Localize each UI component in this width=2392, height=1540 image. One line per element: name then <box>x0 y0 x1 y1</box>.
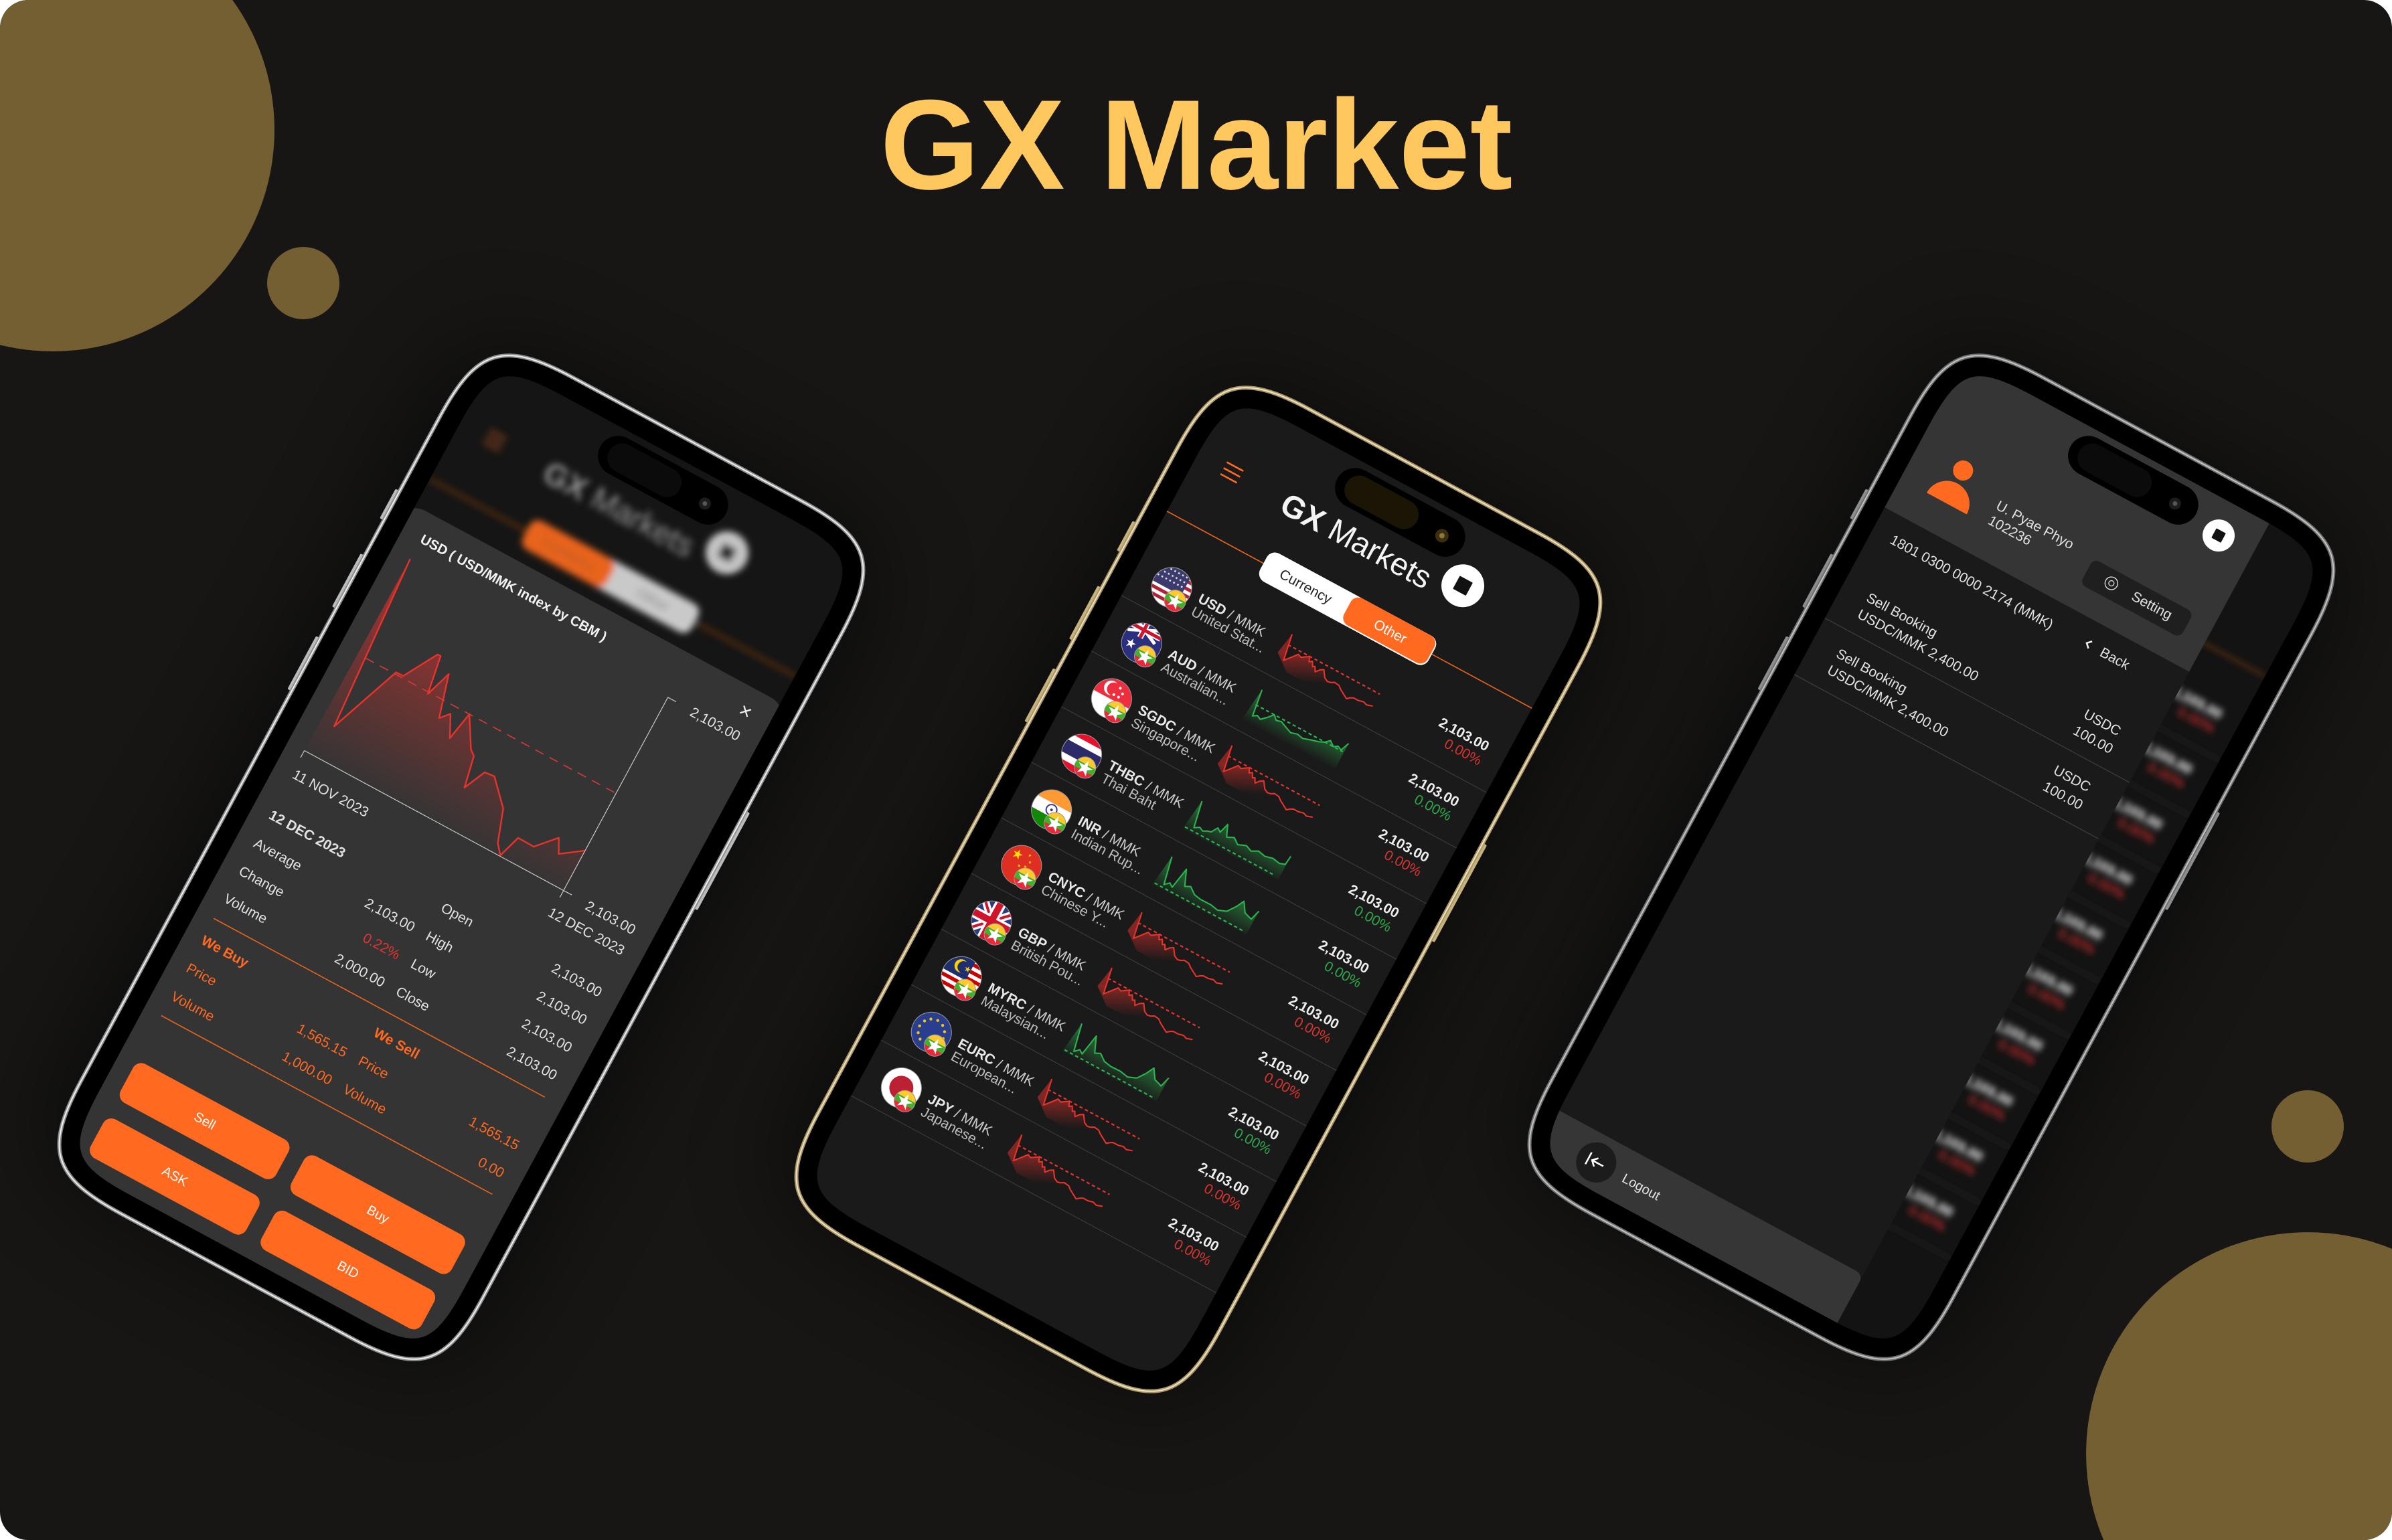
dynamic island <box>2061 429 2205 532</box>
buy and sell rates: Volume <box>340 1082 389 1118</box>
row: EURC: 2,103.00 <box>1196 1160 1251 1199</box>
row: GBP: British Pou... <box>1008 938 1086 989</box>
flag: USA <box>1144 560 1199 614</box>
row: USD <box>1144 560 1493 774</box>
logout panel: Logout <box>1619 1171 1663 1204</box>
row: AUD: AUD / MMK <box>1166 647 1239 696</box>
logo <box>2197 514 2241 558</box>
button: ASK: ASK <box>159 1164 190 1189</box>
dynamic island <box>1328 461 1472 564</box>
row: USD: 2,103.00 <box>1436 715 1492 754</box>
row: SGDC: 2,103.00 <box>1376 826 1431 865</box>
icon: menu <box>1220 462 1243 483</box>
phone frame <box>772 363 1625 1416</box>
row: INR: 0.00% <box>1322 958 1364 991</box>
row: JPY <box>874 1061 1223 1275</box>
daily stats: 2,103.00 <box>534 989 589 1028</box>
phone frame <box>1505 331 2358 1384</box>
screen <box>48 355 868 1373</box>
dynamic island <box>590 429 735 532</box>
icon: logout arrow <box>1585 1152 1607 1172</box>
decorative circle: top left small <box>267 247 339 319</box>
blurred background list: 2,103.00 <box>1930 1126 1986 1165</box>
button: Sell: Sell <box>191 1110 218 1133</box>
flag: Japan <box>874 1061 929 1115</box>
row: AUD: 0.00% <box>1412 792 1454 824</box>
row: CNYC: 0.00% <box>1291 1014 1334 1047</box>
row: CNYC <box>993 839 1343 1052</box>
blurred background list: 2,103.00 <box>1900 1181 1956 1221</box>
row separators <box>851 596 1487 1293</box>
row: SGDC: 0.00% <box>1382 847 1424 879</box>
blurred background list: 0.00% <box>2115 815 2157 847</box>
flag: Thailand <box>1054 727 1109 782</box>
row: INR: INR / MMK <box>1075 813 1143 859</box>
row: AUD: 2,103.00 <box>1406 770 1461 810</box>
row: USD: United Stat... <box>1188 604 1267 656</box>
blurred background list: 0.00% <box>2055 926 2097 958</box>
back link <box>2083 637 2132 673</box>
blurred background list: 2,103.00 <box>2169 683 2225 722</box>
daily stats: Average <box>251 836 304 874</box>
booking row 1: USDC <box>2081 707 2124 739</box>
daily stats: Low <box>408 956 438 982</box>
screen <box>800 391 1597 1388</box>
daily stats <box>221 807 605 1084</box>
buy and sell rates: Price <box>355 1053 391 1082</box>
buy and sell rates: 0.00 <box>475 1154 507 1181</box>
button: BID: BID <box>335 1258 362 1282</box>
blurred background app header: GX Markets <box>538 454 700 564</box>
booking row 2: USDC <box>2051 762 2093 795</box>
blurred background list: 0.00% <box>1935 1147 1978 1179</box>
button: Sell <box>116 1059 293 1183</box>
blurred background list: 0.00% <box>2085 870 2128 902</box>
decorative circle: bottom right large <box>2086 1232 2392 1540</box>
blurred background list: 2,103.00 <box>2109 794 2165 833</box>
row: EURC: European... <box>948 1049 1020 1097</box>
button: Buy <box>287 1152 469 1278</box>
row: GBP: 0.00% <box>1261 1070 1304 1102</box>
row: INR <box>1024 782 1373 997</box>
row: MYRC: MYRC / MMK <box>985 980 1068 1035</box>
title: GX Market <box>880 74 1512 216</box>
blurred background list: 2,103.00 <box>1960 1070 2015 1110</box>
row: THBC <box>1054 727 1403 941</box>
blurred background list: 2,103.00 <box>2079 849 2135 888</box>
buy and sell rates: Price <box>183 960 219 989</box>
user name: 102236 <box>1986 513 2034 549</box>
row: JPY: JPY / MMK <box>925 1092 995 1138</box>
drawer header <box>1885 359 2269 672</box>
blurred background list: 2,103.00 <box>2140 738 2195 778</box>
blurred background list <box>1883 640 2265 1259</box>
buy and sell rates <box>169 932 538 1181</box>
daily stats: 2,103.00 <box>549 960 605 1001</box>
booking row 1: USDC/MMK 2,400.00 <box>1855 606 1981 685</box>
buy and sell rates: We Sell <box>371 1025 422 1062</box>
flag: China <box>994 839 1048 893</box>
row: CNYC: CNYC / MMK <box>1045 869 1127 923</box>
blurred background app header: Currency <box>540 534 597 575</box>
blurred background list: 2,103.00 <box>1990 1015 2045 1055</box>
flag: India <box>1024 782 1079 837</box>
phone: left, chart detail screen <box>13 313 912 1399</box>
row: AUD <box>1114 616 1463 830</box>
blurred background list: 0.00% <box>2174 704 2217 736</box>
row: USD: USD / MMK <box>1196 591 1268 640</box>
daily stats: Change <box>236 863 287 900</box>
flag: United Kingdom <box>964 894 1019 948</box>
decorative circle: right small <box>2271 1090 2344 1163</box>
flag: Singapore <box>1085 671 1139 726</box>
setting button <box>2080 558 2194 638</box>
booking row 1 <box>1855 590 2125 757</box>
blurred background list: 0.00% <box>2025 980 2067 1013</box>
row: SGDC <box>1084 671 1433 885</box>
blurred background list: 0.00% <box>1966 1092 2008 1124</box>
row: THBC: 0.00% <box>1352 903 1394 936</box>
row: GBP: 2,103.00 <box>1256 1049 1311 1088</box>
blurred background app header <box>422 393 842 690</box>
daily stats: 0.22% <box>360 930 402 963</box>
row: USD: 0.00% <box>1441 736 1484 768</box>
buy and sell rates: 1,000.00 <box>279 1049 335 1088</box>
booking row 1: Sell Booking <box>1864 590 1940 640</box>
setting button: Setting <box>2129 589 2174 623</box>
row: MYRC: 2,103.00 <box>1226 1104 1281 1144</box>
toggle <box>1256 549 1439 669</box>
logo <box>1434 557 1492 615</box>
daily stats: Close <box>393 984 432 1015</box>
daily stats: 12 DEC 2023 <box>266 807 348 861</box>
row: INR: 2,103.00 <box>1316 937 1372 976</box>
logout panel <box>1533 1110 1863 1323</box>
phone: center, market list screen <box>750 345 1649 1431</box>
price chart <box>301 558 676 902</box>
row: JPY: 0.00% <box>1172 1236 1214 1269</box>
button: BID <box>257 1207 438 1333</box>
booking row 2: 100.00 <box>2040 779 2085 813</box>
daily stats: Volume <box>221 891 270 927</box>
booking row 2: Sell Booking <box>1834 646 1909 697</box>
row: GBP: GBP / MMK <box>1016 924 1089 974</box>
chart axis labels: 2,103.00 <box>688 705 743 744</box>
booking row 1: 100.00 <box>2071 723 2116 757</box>
daily stats: 2,103.00 <box>504 1044 560 1084</box>
blurred background list: 0.00% <box>1905 1202 1948 1235</box>
chart axis labels: 2,103.00 <box>582 898 638 938</box>
chart axis labels <box>290 552 743 958</box>
row: JPY: 2,103.00 <box>1166 1215 1221 1255</box>
daily stats: Open <box>438 900 476 930</box>
row: THBC: 2,103.00 <box>1346 881 1402 921</box>
decorative circle: top left large <box>0 0 274 351</box>
blurred background list: 2,103.00 <box>2020 960 2075 999</box>
row: EURC: EURC / MMK <box>955 1036 1037 1090</box>
row: SGDC: Singapore... <box>1129 715 1202 765</box>
back link: Back <box>2097 645 2132 673</box>
row: MYRC: Malaysian... <box>978 993 1052 1042</box>
row: EURC: 0.00% <box>1202 1181 1244 1213</box>
daily stats: 2,000.00 <box>332 951 388 991</box>
phone: right, account drawer screen <box>1483 313 2382 1399</box>
row: SGDC: SGDC / MMK <box>1135 702 1218 756</box>
daily stats: 2,103.00 <box>519 1016 574 1055</box>
screen <box>1533 359 2330 1356</box>
chart axis labels: 11 NOV 2023 <box>290 767 371 821</box>
user name: U. Pyae Phyo <box>1994 498 2076 552</box>
flag: European Union <box>904 1005 959 1059</box>
drawer panel <box>1533 359 2269 1323</box>
row: INR: Indian Rup... <box>1068 827 1146 878</box>
toggle: Other <box>1371 616 1409 647</box>
daily stats: 2,103.00 <box>362 895 418 935</box>
row: CNYC: 2,103.00 <box>1286 993 1342 1033</box>
blurred background list: 0.00% <box>2145 760 2187 792</box>
button: ASK <box>86 1115 263 1238</box>
chart axis labels: 12 DEC 2023 <box>546 905 627 958</box>
row: MYRC <box>934 950 1283 1164</box>
blurred background app header: Other <box>633 585 672 615</box>
booking row 2 <box>1825 645 2095 813</box>
row: CNYC: Chinese Y... <box>1038 882 1111 931</box>
blurred background list: 2,103.00 <box>2050 904 2105 944</box>
button: Buy: Buy <box>364 1203 392 1227</box>
account number: 1801 0300 0000 2174 (MMK) <box>1887 532 2056 632</box>
close icon: × <box>735 698 756 724</box>
booking row 2: USDC/MMK 2,400.00 <box>1825 663 1951 740</box>
modal heading: USD ( USD/MMK index by CBM ) <box>418 531 609 645</box>
icon: user <box>1927 452 1989 515</box>
row: THBC: Thai Baht <box>1099 771 1159 813</box>
modal panel <box>48 501 789 1373</box>
phone frame <box>35 331 888 1384</box>
row: EURC <box>904 1005 1253 1219</box>
row: GBP <box>964 894 1313 1108</box>
row: AUD: Australian... <box>1158 660 1231 708</box>
toggle: Currency <box>1277 566 1334 607</box>
app title: GX Markets <box>1275 485 1438 596</box>
blurred background list: 0.00% <box>1995 1036 2038 1069</box>
row: MYRC: 0.00% <box>1231 1125 1274 1158</box>
row: JPY: Japanese... <box>919 1104 989 1152</box>
buy and sell rates: We Buy <box>199 933 251 971</box>
flag: Australia <box>1115 616 1169 671</box>
buy and sell rates: 1,565.15 <box>466 1114 522 1153</box>
row: THBC: THBC / MMK <box>1105 758 1186 811</box>
daily stats: High <box>423 928 456 956</box>
buy and sell rates: 1,565.15 <box>294 1021 349 1061</box>
buy and sell rates: Volume <box>169 989 217 1025</box>
flag: Malaysia <box>934 950 989 1004</box>
